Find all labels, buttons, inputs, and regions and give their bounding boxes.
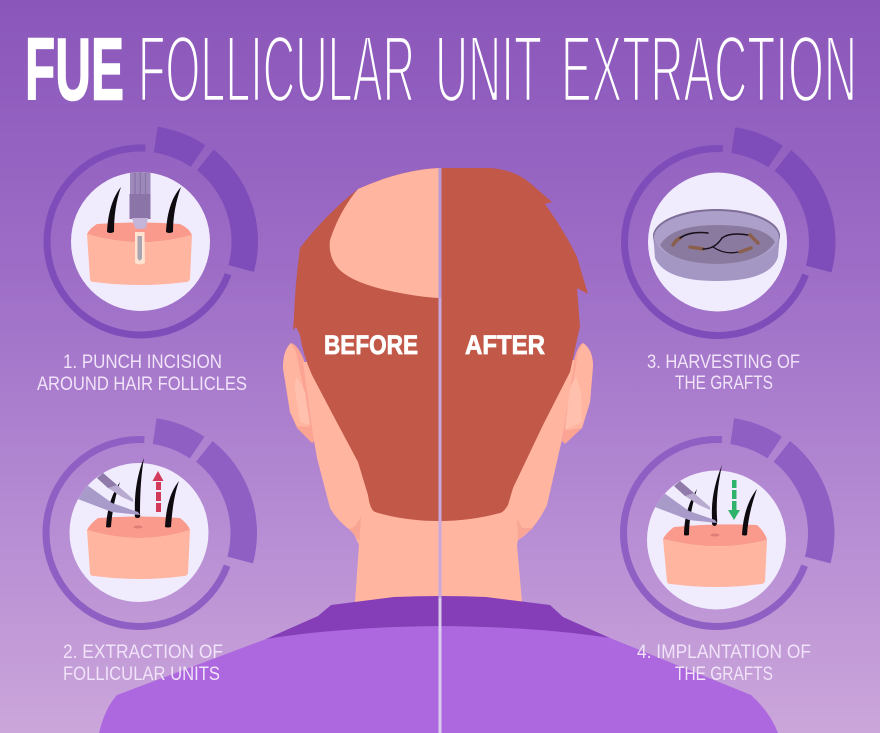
step 3 ring (625, 127, 836, 335)
man seen from behind (99, 168, 778, 733)
step 4 caption: 4. IMPLANTATION OF (637, 642, 811, 663)
step 2 caption: FOLLICULAR UNITS (63, 664, 220, 685)
step 3 caption (647, 352, 800, 394)
before and after divider (438, 168, 442, 733)
title: FOLLICULAR (138, 16, 415, 122)
shoulders (99, 626, 778, 733)
step 3 caption: THE GRAFTS (675, 373, 773, 394)
step 2 caption (63, 642, 223, 685)
step 2 illustration: extraction (70, 458, 208, 602)
step 2 ring (46, 418, 257, 626)
bald patch (330, 168, 439, 298)
step 1 illustration: punch incision (71, 165, 210, 311)
title: UNIT (435, 16, 542, 122)
step 3 caption: 3. HARVESTING OF (647, 352, 800, 373)
hair left side (293, 168, 439, 521)
step 1 caption: 1. PUNCH INCISION (63, 352, 222, 373)
title: FUE (25, 20, 124, 118)
neck shadows (349, 516, 533, 541)
step 1 ring (47, 127, 258, 335)
step 4 caption (637, 642, 811, 685)
label: after: AFTER (465, 330, 545, 360)
step 4 ring (624, 418, 835, 626)
hair right side (440, 168, 588, 521)
collar (266, 596, 610, 640)
label: before: BEFORE (324, 330, 418, 360)
step 3 illustration: petri dish (648, 172, 787, 312)
step 2 caption: 2. EXTRACTION OF (63, 642, 223, 663)
ears (283, 343, 593, 444)
neck and skin (303, 360, 575, 602)
step 4 caption: THE GRAFTS (675, 664, 773, 685)
step 4 illustration: implantation (647, 465, 786, 610)
step 1 caption: AROUND HAIR FOLLICLES (37, 374, 247, 395)
step 1 caption (37, 352, 247, 395)
